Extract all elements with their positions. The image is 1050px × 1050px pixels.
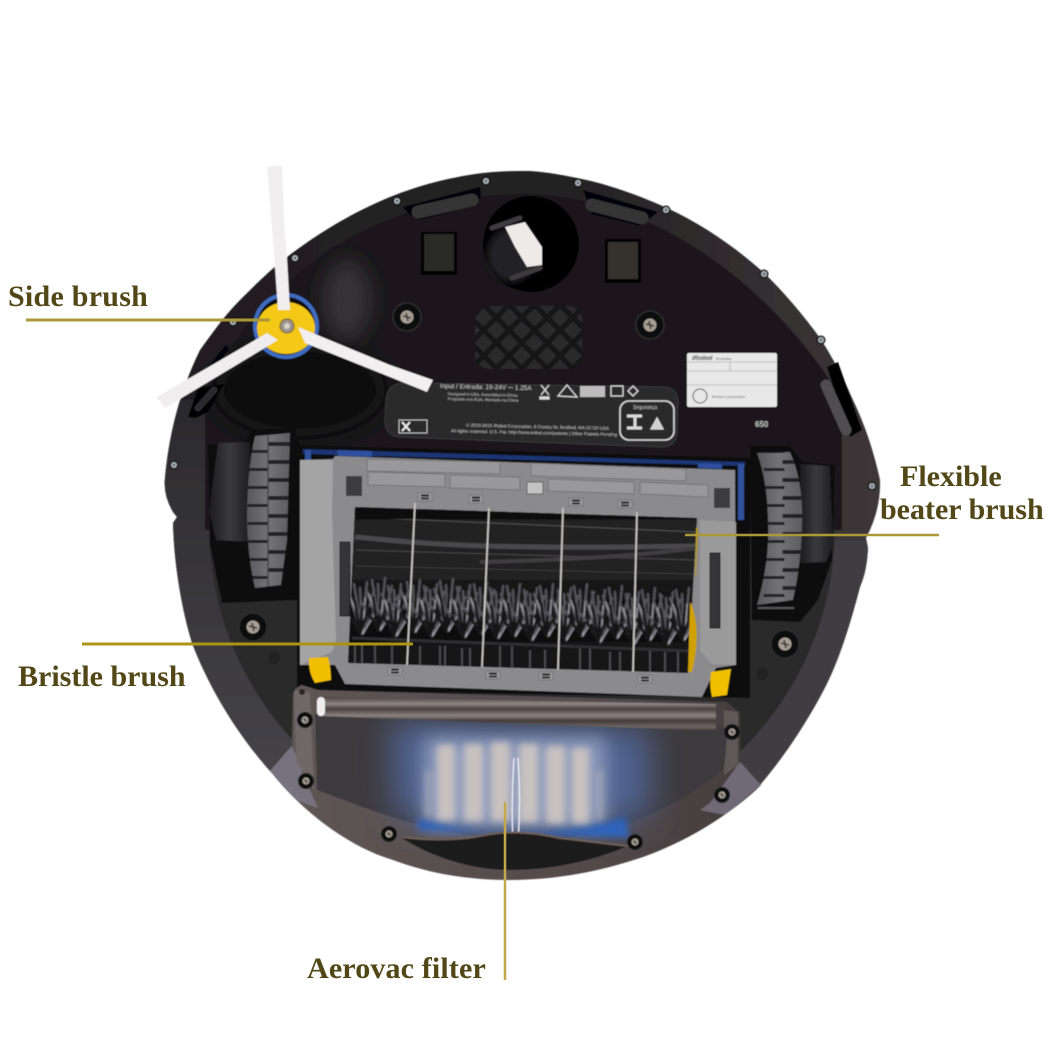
white product sticker: Roomba bbox=[716, 356, 732, 361]
cavity bbox=[297, 445, 750, 698]
gray frame bbox=[300, 456, 736, 697]
plate screws bbox=[239, 303, 799, 680]
caster wheel bbox=[483, 196, 579, 292]
right wheel bbox=[750, 446, 835, 622]
bottom clips bbox=[388, 493, 652, 683]
label: flexible beater brush: beater brush bbox=[880, 493, 1044, 526]
leader: bristle brush bbox=[82, 642, 413, 646]
label: aerovac filter: Aerovac filter bbox=[307, 952, 486, 985]
flexible beater brush bbox=[340, 507, 710, 580]
side slots bbox=[188, 345, 862, 437]
blue liner bbox=[303, 449, 745, 520]
leader: aerovac filter bbox=[504, 802, 506, 980]
left lighter wing bbox=[300, 460, 336, 665]
rating text: Projetado nos EUA, Montado na China bbox=[448, 396, 519, 403]
bristle brush bbox=[343, 578, 702, 672]
dust bin bbox=[270, 685, 761, 880]
top latches bbox=[346, 476, 730, 508]
bin ear bbox=[299, 689, 305, 695]
top bumper slots bbox=[403, 187, 658, 226]
rating text: © 2010-2015 iRobot Corporation, 8 Crosby Dr, Bedford, MA 01730 USA bbox=[466, 422, 609, 431]
cliff sensor windows bbox=[421, 232, 641, 283]
segurança caption: Segurança bbox=[633, 405, 657, 411]
top slots bbox=[367, 459, 708, 497]
rating text bbox=[439, 383, 619, 437]
white product sticker: iRobot bbox=[692, 355, 713, 362]
bin screws bbox=[297, 712, 740, 850]
cleaning head bbox=[297, 445, 750, 698]
model number: 650 bbox=[755, 420, 769, 429]
inner window bbox=[315, 714, 728, 839]
rating text: All rights reserved. U.S. Pat. http://www.irobot.com/patents | Other Patents Pending bbox=[451, 428, 618, 437]
rating plate bbox=[385, 383, 678, 447]
retaining wires bbox=[407, 503, 637, 672]
label: flexible beater brush: Flexible bbox=[900, 460, 1002, 493]
bin contents clipped bbox=[270, 690, 761, 870]
label: bristle brush: Bristle brush bbox=[18, 660, 186, 693]
leader: flexible beater brush bbox=[685, 534, 939, 536]
rating text: Input / Entrada: 19-24V ⎓ 1.25A bbox=[440, 383, 532, 392]
regulatory icons bbox=[540, 385, 674, 440]
roller bbox=[318, 697, 716, 731]
blue haze bbox=[390, 722, 650, 828]
diamond pad bbox=[475, 306, 582, 369]
white product sticker: iRobot Corporation bbox=[712, 394, 746, 399]
right lighter wing bbox=[700, 520, 736, 665]
plate shading bbox=[215, 260, 385, 436]
rating text: Designed in USA, Assembled in China bbox=[448, 391, 518, 398]
roller highlight bbox=[317, 697, 325, 716]
lower body lobes bbox=[164, 194, 868, 784]
robot vacuum underside bbox=[157, 166, 890, 880]
body silhouette bbox=[165, 171, 880, 785]
beater window bbox=[348, 507, 697, 673]
left wheel bbox=[208, 428, 300, 603]
bin shine bbox=[512, 758, 520, 842]
bin shell bbox=[270, 685, 761, 880]
filter slats bbox=[425, 742, 603, 823]
dust compartment bbox=[402, 832, 628, 870]
rim screws bbox=[170, 176, 876, 490]
side brush bbox=[157, 166, 433, 408]
white product sticker bbox=[687, 353, 777, 407]
yellow gears and tabs bbox=[309, 528, 731, 697]
carbon strips bbox=[340, 542, 720, 628]
leader: side brush bbox=[26, 318, 270, 322]
small x badge bbox=[399, 420, 427, 433]
label: side brush: Side brush bbox=[8, 280, 148, 313]
